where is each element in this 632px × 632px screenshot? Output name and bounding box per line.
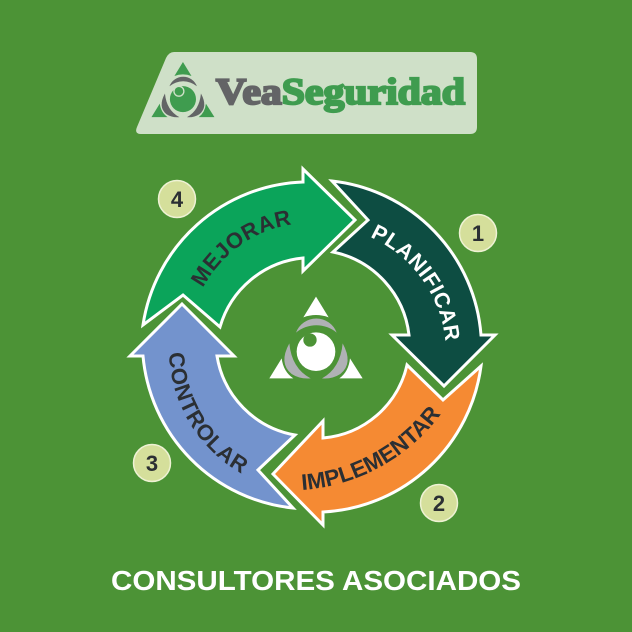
badge 3 <box>134 444 170 482</box>
badge 3: 3 <box>146 451 158 476</box>
label: implementar: IMPLEMENTAR <box>302 407 441 490</box>
badge 4: 4 <box>171 187 184 212</box>
label: mejorar: MEJORAR <box>190 210 292 287</box>
logo icon <box>151 62 214 117</box>
badge 1 <box>460 214 496 252</box>
logo panel <box>136 52 477 134</box>
arrow: mejorar <box>141 166 357 330</box>
arrow: controlar <box>126 302 298 510</box>
badge 4 <box>158 180 196 218</box>
label: controlar: CONTROLAR <box>169 353 248 474</box>
center eye icon <box>269 297 363 378</box>
badge 1: 1 <box>472 221 484 246</box>
label: planificar: PLANIFICAR <box>371 224 460 341</box>
badge 2: 2 <box>433 491 445 516</box>
badge 2 <box>420 484 458 522</box>
logo wordmark: VeaSeguridad <box>216 72 465 113</box>
arrow: planificar <box>328 179 498 388</box>
footer title: CONSULTORES ASOCIADOS <box>111 565 521 596</box>
arrow: implementar <box>271 362 483 528</box>
